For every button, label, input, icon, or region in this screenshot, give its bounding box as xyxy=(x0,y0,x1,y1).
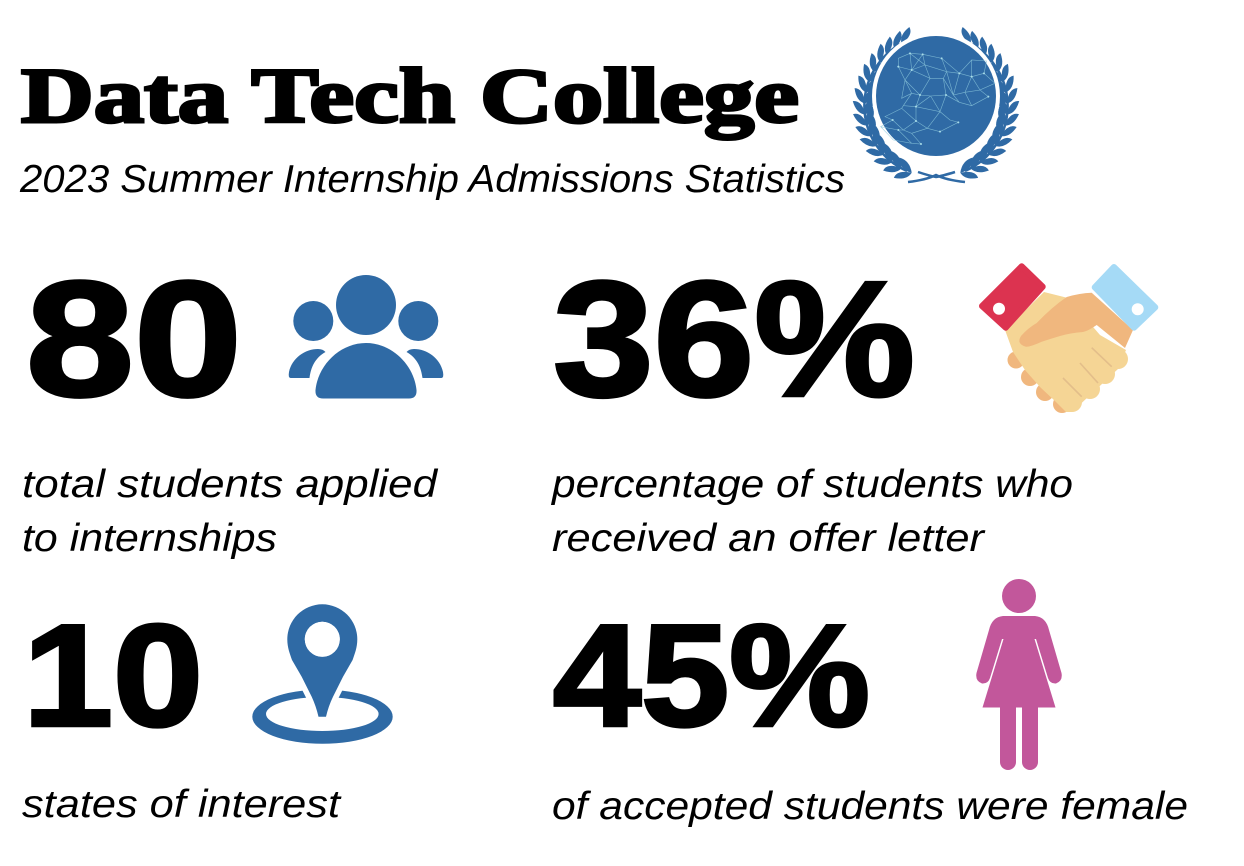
stat number: 10: 10 xyxy=(23,594,203,756)
label: received an offer letter: received an offer letter xyxy=(552,517,986,560)
icon: handshake xyxy=(982,266,1155,413)
subtitle: 2023 Summer Internship Admissions Statistics xyxy=(19,158,845,201)
stat number: 80: 80 xyxy=(26,248,242,430)
label: total students: total students applied xyxy=(22,463,438,506)
label: to internships: to internships xyxy=(22,517,277,560)
icon: female figure xyxy=(976,579,1062,770)
icon: map location pin xyxy=(252,604,393,744)
label: accepted female: of accepted students were female xyxy=(552,785,1188,828)
icon: group of people xyxy=(289,275,443,398)
icon: college laurel network logo xyxy=(852,26,1020,183)
stat number: 45%: 45% xyxy=(553,594,870,756)
label: states of interest: states of interest xyxy=(22,783,342,826)
label: percentage of students: percentage of students who xyxy=(551,463,1073,506)
title: Data Tech College xyxy=(21,52,799,139)
stat number: 36%: 36% xyxy=(553,248,915,430)
